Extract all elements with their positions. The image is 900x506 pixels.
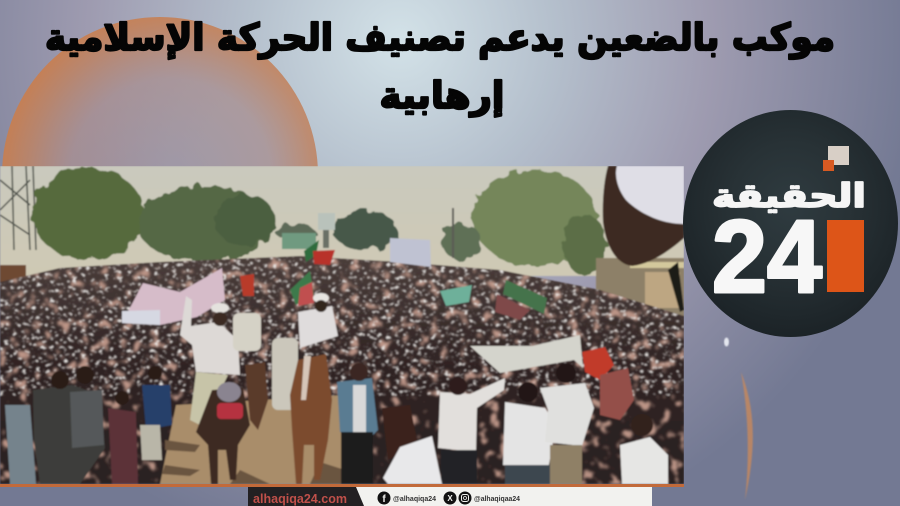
flag: green and red bbox=[304, 240, 319, 262]
horse centre bbox=[245, 354, 332, 484]
banner: green bbox=[503, 280, 547, 314]
icon: instagram bbox=[458, 492, 472, 504]
logo light square bbox=[828, 146, 849, 165]
banner: pink bbox=[122, 268, 225, 325]
crowd base bbox=[0, 256, 684, 484]
dirt road bbox=[160, 395, 345, 484]
decorative orange wisp bbox=[741, 372, 753, 500]
title line 2: إرهابية bbox=[380, 74, 504, 117]
buildings on the right bbox=[0, 258, 684, 320]
red shirt bbox=[582, 347, 614, 380]
logo disc bbox=[683, 110, 898, 337]
logo orange square bbox=[823, 160, 834, 171]
banner: grey-blue bbox=[390, 238, 431, 267]
green building and water tower bbox=[282, 208, 454, 258]
man: white tee centre bbox=[503, 402, 556, 470]
trees bbox=[32, 168, 607, 275]
banner: white pale bbox=[122, 310, 160, 325]
icon: facebook bbox=[378, 492, 390, 505]
flag: sudan bbox=[290, 271, 314, 305]
logo: alhaqiqa 24 bbox=[683, 110, 898, 337]
crowd white clothing speckle bbox=[0, 256, 684, 396]
man: white shirt centre bbox=[438, 378, 505, 452]
road shadows bbox=[162, 440, 345, 484]
logo orange bar bbox=[827, 220, 864, 292]
crowd foreground left bbox=[5, 366, 172, 484]
pylon bbox=[0, 166, 36, 250]
footer dark tab bbox=[248, 487, 364, 506]
banner: white lower bbox=[470, 335, 583, 373]
sky bbox=[0, 166, 684, 276]
man: bottom right white bbox=[620, 437, 668, 484]
horse riders bbox=[180, 293, 338, 484]
raised hand with white cap bbox=[603, 166, 684, 312]
man: dark bbox=[382, 405, 418, 460]
footer website bar bbox=[248, 487, 652, 506]
man: white tee right bbox=[540, 383, 594, 446]
facebook handle: @alhaqiqa24 bbox=[393, 496, 436, 503]
woman: pink scarf bbox=[600, 368, 634, 420]
website address: alhaqiqa24.com bbox=[253, 491, 347, 506]
banner: teal bbox=[440, 285, 472, 306]
man: bottom left white bbox=[383, 436, 442, 484]
flag: red bbox=[240, 274, 254, 296]
rider centre bbox=[233, 293, 338, 410]
title bbox=[45, 16, 835, 117]
small white dot bbox=[724, 338, 729, 346]
horse left bbox=[196, 382, 250, 484]
icon: facebook: f bbox=[382, 494, 386, 505]
orange rule under photo bbox=[0, 484, 684, 487]
logo arabic wordmark: الحقيقة bbox=[712, 176, 866, 215]
rider left bbox=[180, 296, 240, 425]
crowd foreground right bbox=[337, 347, 668, 484]
banner: maroon bbox=[495, 294, 530, 320]
logo number 24: 24 bbox=[712, 199, 822, 314]
protest crowd photo bbox=[0, 166, 684, 484]
footer white strip bbox=[248, 487, 652, 506]
decorative orange circle bbox=[2, 17, 318, 333]
title line 1: موكب بالضعين يدعم تصنيف الحركة الإسلامية bbox=[45, 16, 835, 59]
icon: x: X bbox=[447, 494, 453, 503]
instagram handle: @alhaqiqaa24 bbox=[474, 496, 520, 503]
icon: x bbox=[444, 492, 456, 504]
banners and flags bbox=[122, 238, 583, 373]
crowd skin and clothing speckle bbox=[0, 256, 684, 484]
man: blue jacket bbox=[337, 378, 378, 436]
